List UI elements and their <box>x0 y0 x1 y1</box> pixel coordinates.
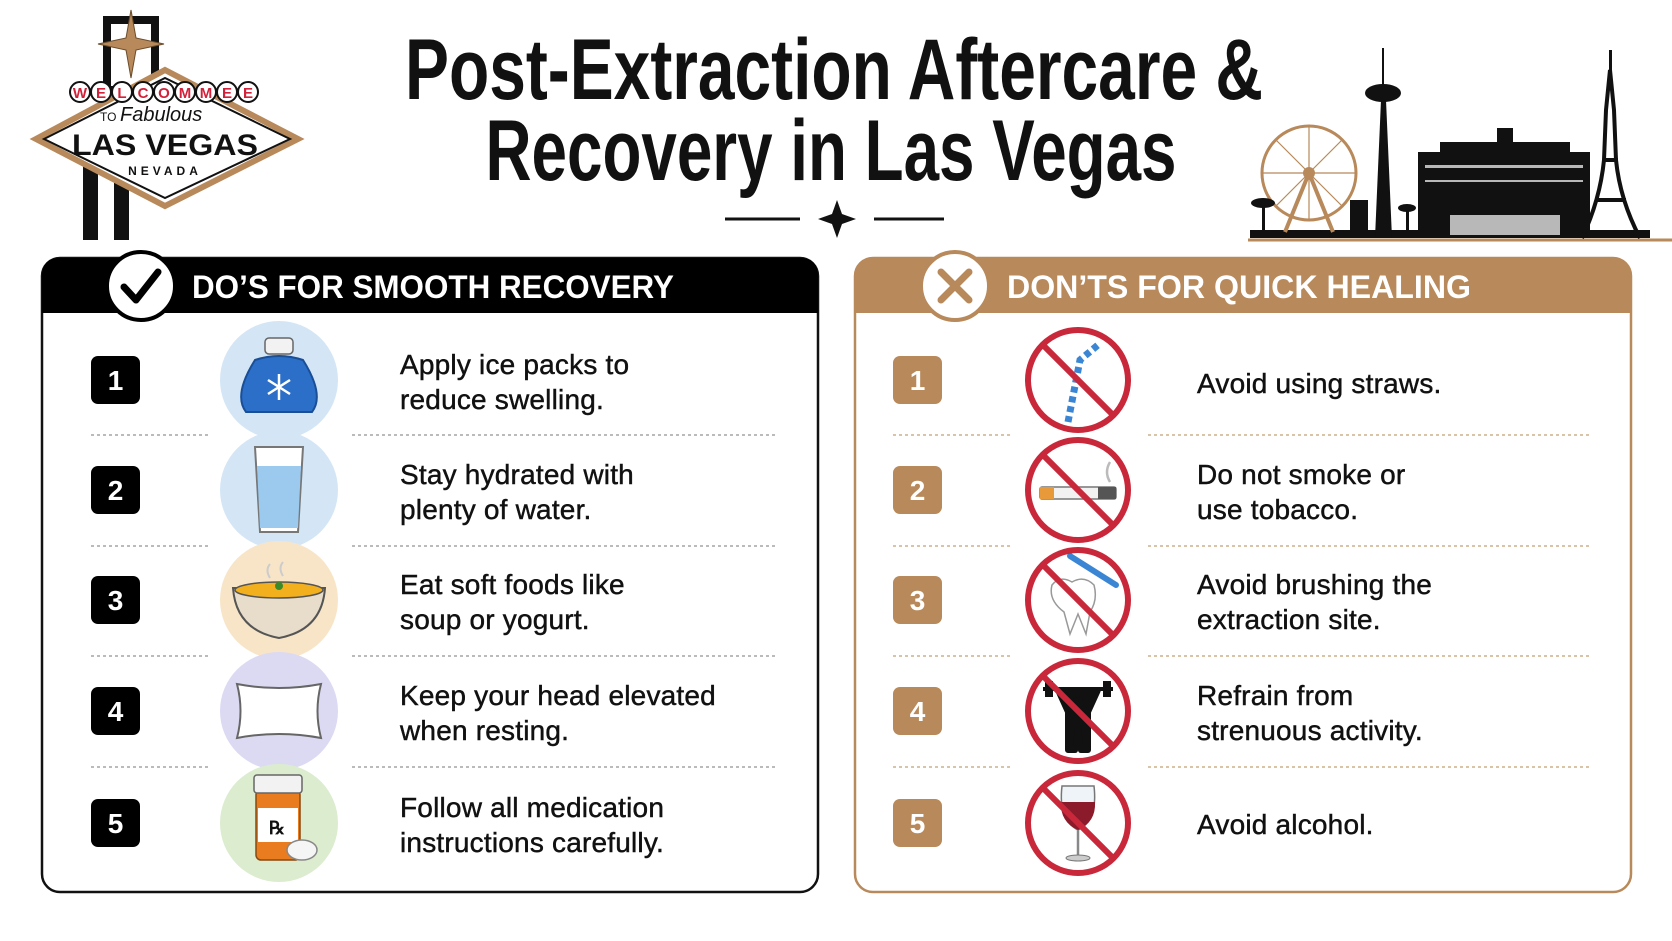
row 3: soup <box>91 541 625 659</box>
row 3: soup: Eat soft foods like <box>400 569 625 600</box>
row 2: water: plenty of water. <box>400 494 592 525</box>
icon: las vegas sign: E <box>243 85 253 102</box>
panel: do's <box>42 252 818 892</box>
row 4: no strenuous activity <box>893 661 1423 761</box>
row 3: soup: soup or yogurt. <box>400 604 590 635</box>
row 5: medication <box>91 764 664 882</box>
icon: las vegas sign: LAS VEGAS <box>72 129 258 162</box>
row 4: no strenuous activity: Refrain from <box>1197 680 1353 711</box>
row 1: ice pack: 1 <box>108 365 123 396</box>
row 5: medication: Follow all medication <box>400 792 664 823</box>
row 4: pillow: 4 <box>108 696 124 727</box>
row 4: pillow: Keep your head elevated <box>400 680 716 711</box>
row 5: medication: instructions carefully. <box>400 827 664 858</box>
icon: las vegas sign: C <box>138 85 149 102</box>
row 4: no strenuous activity: 4 <box>910 696 926 727</box>
row 3: soup: 3 <box>108 585 123 616</box>
header: do's: DO’S FOR SMOOTH RECOVERY <box>192 269 674 305</box>
row 5: no alcohol: Avoid alcohol. <box>1197 809 1374 840</box>
icon: las vegas sign: NEVADA <box>128 164 202 178</box>
row 2: water: Stay hydrated with <box>400 459 634 490</box>
row 5: no alcohol <box>893 773 1374 873</box>
title <box>405 22 1263 199</box>
title: Recovery in Las Vegas <box>486 103 1176 199</box>
header: don'ts <box>855 252 1631 320</box>
row 3: no brushing: extraction site. <box>1197 604 1381 635</box>
row 1: ice pack <box>91 321 629 439</box>
icon: las vegas sign: TO <box>100 110 116 124</box>
row 2: no smoking: 2 <box>910 475 925 506</box>
row 1: no straws <box>893 330 1442 430</box>
row 1: ice pack: reduce swelling. <box>400 384 604 415</box>
row 2: no smoking: Do not smoke or <box>1197 459 1405 490</box>
title divider with star <box>725 200 944 238</box>
header: don'ts: DON’TS FOR QUICK HEALING <box>1007 269 1471 305</box>
row 5: medication: ℞ <box>269 818 285 838</box>
skyline <box>1248 48 1672 240</box>
row 4: no strenuous activity: strenuous activity. <box>1197 715 1423 746</box>
row 3: no brushing: 3 <box>910 585 925 616</box>
header: do's <box>42 252 818 320</box>
row 5: medication: 5 <box>108 808 123 839</box>
row 4: pillow <box>91 652 716 770</box>
icon: las vegas sign: M <box>200 85 212 102</box>
icon: las vegas sign <box>36 10 298 240</box>
row 5: no alcohol: 5 <box>910 808 925 839</box>
title: Post-Extraction Aftercare & <box>405 22 1263 118</box>
icon: las vegas sign: E <box>96 85 106 102</box>
icon: las vegas sign: Fabulous <box>120 104 202 126</box>
row 1: no straws: Avoid using straws. <box>1197 368 1442 399</box>
icon: las vegas sign: E <box>222 85 232 102</box>
panel: don'ts <box>855 252 1631 892</box>
icon: las vegas sign: O <box>158 85 170 102</box>
row 3: no brushing <box>893 550 1432 650</box>
icon: las vegas sign: L <box>117 85 127 102</box>
row 4: pillow: when resting. <box>399 715 569 746</box>
row 1: ice pack: Apply ice packs to <box>400 349 629 380</box>
row 2: water: 2 <box>108 475 123 506</box>
row 2: no smoking: use tobacco. <box>1197 494 1358 525</box>
row 1: no straws: 1 <box>910 365 925 396</box>
row 3: no brushing: Avoid brushing the <box>1197 569 1432 600</box>
icon: las vegas sign: M <box>179 85 191 102</box>
icon: las vegas sign: W <box>73 85 88 102</box>
row 2: water <box>91 431 634 549</box>
row 2: no smoking <box>893 440 1405 540</box>
